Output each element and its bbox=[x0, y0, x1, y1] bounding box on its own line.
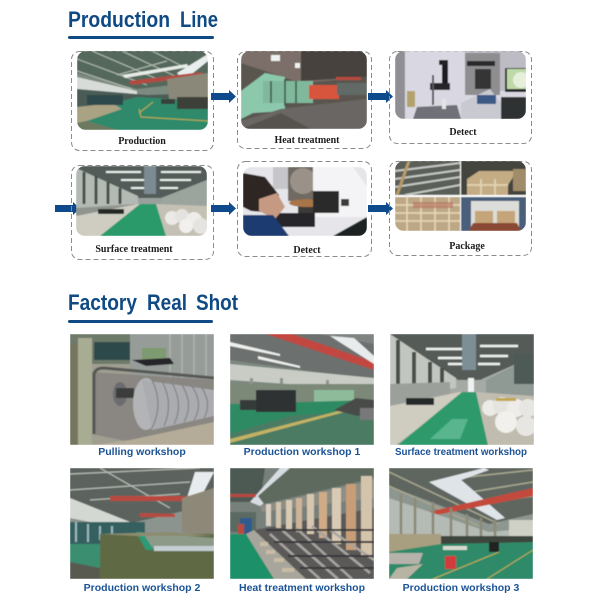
panel: Detect step with operator bbox=[238, 162, 372, 256]
heading: Factory Real Shot: Shot bbox=[196, 290, 239, 315]
panel: Production step bbox=[72, 51, 214, 150]
photo: production hall bbox=[77, 51, 208, 130]
arrow: row wrap into Surface treatment bbox=[55, 202, 80, 215]
panel: Package step bbox=[390, 161, 532, 256]
panel: Heat treatment step bbox=[238, 51, 372, 148]
label: Surface treatment: Surface treatment bbox=[95, 244, 173, 255]
panel: Heat treatment workshop bbox=[230, 468, 374, 594]
arrow: Surface treatment to Detect bbox=[211, 202, 236, 215]
caption: Production workshop 3 bbox=[403, 582, 519, 594]
photo: operator at hardness tester bbox=[243, 167, 367, 236]
panel: Production workshop 2 bbox=[70, 468, 214, 594]
label: Package: Package bbox=[449, 241, 485, 252]
heading: Production Line: Line bbox=[180, 7, 218, 32]
photo: green aisle and white bags bbox=[390, 334, 537, 445]
photo: wire coil on machine bbox=[70, 334, 214, 445]
heading: Factory Real Shot: Real bbox=[147, 290, 187, 315]
panel: Pulling workshop bbox=[70, 334, 214, 458]
caption: Production workshop 1 bbox=[244, 446, 360, 458]
heading: Production Line: Production bbox=[68, 7, 170, 32]
label: Heat treatment: Heat treatment bbox=[274, 135, 340, 146]
arrow: Heat treatment to Detect bbox=[368, 90, 393, 103]
panel: Production workshop 3 bbox=[389, 468, 533, 594]
photo: workshop with red crane bbox=[230, 334, 374, 445]
panel: Detect step with microscope bbox=[390, 51, 532, 144]
caption: Heat treatment workshop bbox=[239, 582, 365, 594]
caption: Production workshop 2 bbox=[84, 582, 200, 594]
label: Production: Production bbox=[118, 136, 166, 147]
heading: Factory Real Shot bbox=[68, 290, 239, 323]
caption: Surface treatment workshop bbox=[395, 446, 527, 458]
photo: heat treatment line bbox=[241, 51, 367, 129]
panel: Production workshop 1 bbox=[230, 334, 374, 458]
heading: Production Line bbox=[68, 7, 218, 39]
label: Detect: Detect bbox=[293, 245, 321, 256]
panel: Surface treatment workshop bbox=[390, 334, 537, 458]
photo: microscope on bench bbox=[395, 51, 529, 119]
panel: Surface treatment step bbox=[72, 166, 214, 260]
photo: hall with machines and red crane bbox=[389, 468, 533, 579]
photo: surface treatment hall bbox=[76, 166, 209, 236]
caption: Pulling workshop bbox=[98, 446, 186, 458]
arrow: Production to Heat treatment bbox=[211, 90, 236, 103]
photo: hall with green machine cover bbox=[70, 468, 214, 579]
arrow: Detect to Package bbox=[368, 202, 393, 215]
photo: furnace tubes row bbox=[230, 468, 374, 579]
label: Detect: Detect bbox=[449, 127, 477, 138]
photo collage: packaged goods bbox=[395, 161, 526, 231]
heading: Factory Real Shot: Factory bbox=[68, 290, 138, 315]
